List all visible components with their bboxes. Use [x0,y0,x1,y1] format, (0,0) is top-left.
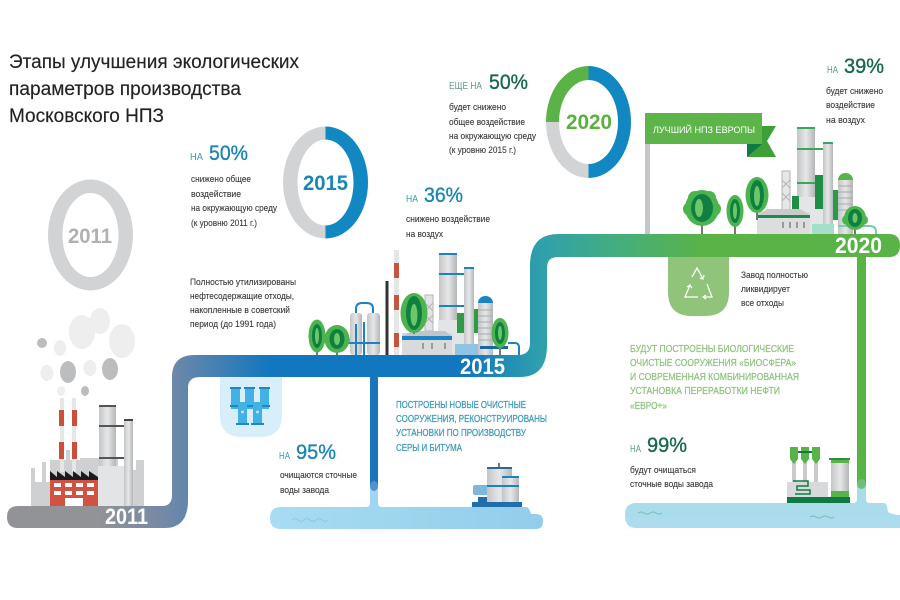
stat: 95% wastewater: 95% [296,441,336,464]
progress ring: 2015: 2015 [303,172,348,195]
text: biological treatment facilities: «ЕВРО+» [630,401,667,412]
text: utilised waste: Полностью утилизированы [190,277,296,288]
stat: further 50% by 2020: общее воздействие [449,117,525,128]
icon: smoke clouds [37,308,135,396]
stat: 95% wastewater: НА [279,451,290,462]
panel: recycling icon tile [668,257,729,316]
sign: best refinery in Europe [645,113,776,235]
illustration: green treatment equipment [787,447,850,503]
text: waste elimination: все отходы [741,298,784,309]
stat: 99% wastewater: сточные воды завода [630,479,714,490]
stat: 50% reduction by 2015 [190,142,277,229]
timeline label: 2011: 2011 [105,504,148,529]
text: biological treatment facilities: ОЧИСТЫЕ СООРУЖЕНИЯ «БИОСФЕРА» [630,358,796,369]
text: new treatment facilities: УСТАНОВКИ ПО ПРОИЗВОДСТВУ [396,428,527,439]
stat: 39% air impact: будет снижено [826,86,883,97]
stat: 39% air impact: 39% [844,55,884,78]
stat: 39% air impact: воздействие [826,100,875,111]
stat: further 50% by 2020: будет снижено [449,102,506,113]
stat: 95% wastewater: очищаются сточные [280,470,357,481]
text: new treatment facilities: СООРУЖЕНИЯ, РЕКОНСТРУИРОВАНЫ [396,414,547,425]
stat: 50% reduction by 2015: 50% [209,142,248,165]
stat: 99% wastewater: НА [630,444,641,455]
stat: 50% reduction by 2015: на окружающую среду [191,203,277,214]
text: waste elimination: Завод полностью [741,270,808,281]
illustration: 2020 refinery [683,127,876,234]
tree [400,293,428,334]
title: параметров производства [9,79,241,100]
icon: stacked drums [230,387,270,425]
text: new treatment facilities: СЕРЫ И БИТУМА [396,443,462,454]
tree [324,325,350,355]
stat: 36% air impact: на воздух [406,229,443,240]
tree [726,195,744,234]
illustration: 2015 refinery [308,250,519,356]
text: utilised waste: нефтесодержащие отходы, [190,291,294,302]
progress ring: 2020 [546,66,631,178]
icon: recycling triangle [685,268,712,299]
stat: 50% reduction by 2015: (к уровню 2011 г.) [191,218,257,229]
stat: 39% air impact [826,55,884,126]
stat: further 50% by 2020: 50% [489,71,528,94]
progress ring: 2015 [283,126,368,238]
timeline label: 2015: 2015 [460,354,505,379]
illustration: 2011 factory [31,398,144,506]
text: biological treatment facilities: УСТАНОВКА ПЕРЕРАБОТКИ НЕФТИ [630,386,780,397]
title: Московского НПЗ [9,106,164,127]
stat: 39% air impact: на воздух [826,115,865,126]
text: utilised waste [190,277,296,330]
stat: further 50% by 2020: ЕЩЕ НА [449,81,482,92]
text: new treatment facilities: ПОСТРОЕНЫ НОВЫЕ ОЧИСТНЫЕ [396,400,526,411]
text: new treatment facilities [396,400,547,454]
sign: best refinery in Europe: ЛУЧШИЙ НПЗ ЕВРОПЫ [653,124,755,136]
progress ring: 2011 [48,180,133,290]
timeline pipe [7,233,900,529]
stat: 95% wastewater [279,441,357,496]
text: biological treatment facilities: И СОВРЕМЕННАЯ КОМБИНИРОВАННАЯ [630,372,799,383]
timeline label: 2020: 2020 [835,233,882,258]
progress ring: 2011: 2011 [68,225,112,248]
tree [746,177,768,220]
stat: 36% air impact: 36% [424,184,463,207]
tree [308,320,326,355]
text: waste elimination [741,270,808,309]
text: biological treatment facilities: БУДУТ ПОСТРОЕНЫ БИОЛОГИЧЕСКИЕ [630,344,794,355]
text: biological treatment facilities [630,344,799,412]
text: waste elimination: ликвидирует [741,284,791,295]
stat: 36% air impact: НА [406,194,418,205]
stat: 39% air impact: НА [827,65,838,76]
stat: 50% reduction by 2015: снижено общее [191,174,251,185]
stat: 36% air impact: снижено воздействие [406,214,490,225]
stat: 99% wastewater: 99% [647,434,687,457]
tree [492,318,508,355]
water pool: 2015 [270,376,543,529]
stat: 50% reduction by 2015: воздействие [191,189,241,200]
stat: 95% wastewater: воды завода [280,485,330,496]
illustration: blue tanks [472,463,522,507]
stat: 50% reduction by 2015: НА [190,152,203,163]
stat: further 50% by 2020: (к уровню 2015 г.) [449,145,516,156]
tree [683,190,721,234]
title [9,52,299,127]
tree [842,206,868,234]
stat: further 50% by 2020: на окружающую среду [449,131,536,142]
title: Этапы улучшения экологических [9,52,299,73]
stat: 36% air impact [406,184,490,240]
water pool: 2020 [625,257,900,528]
text: utilised waste: накопленные в советский [190,305,290,316]
stat: 99% wastewater [630,434,714,490]
panel: drums icon tile [220,377,282,437]
progress ring: 2020: 2020 [566,111,612,134]
stat: further 50% by 2020 [449,71,536,156]
stat: 99% wastewater: будут очищаться [630,465,696,476]
text: utilised waste: период (до 1991 года) [190,319,276,330]
